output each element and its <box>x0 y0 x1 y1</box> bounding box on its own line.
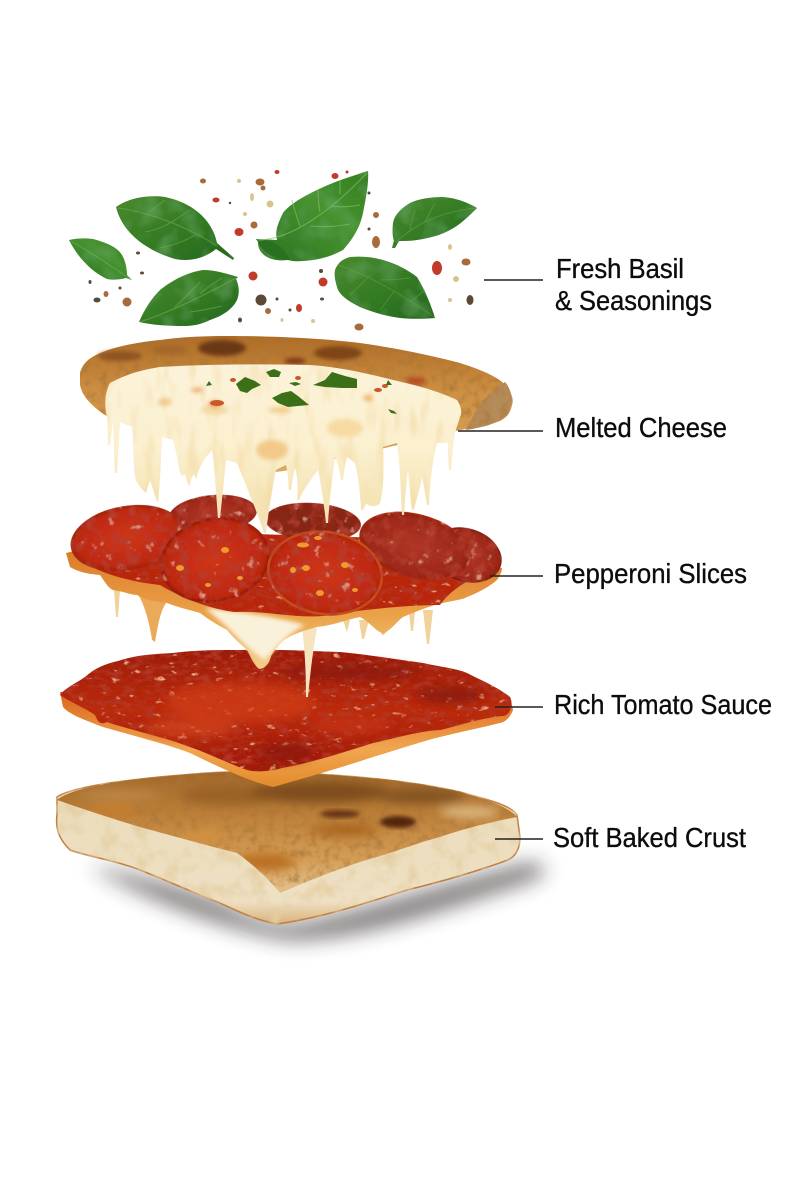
layer: rich tomato sauce <box>60 650 513 787</box>
icon: basil leaf, far left <box>69 238 132 280</box>
red sauce band <box>72 530 498 616</box>
callout: fresh basil and seasonings: Fresh Basil <box>556 253 684 284</box>
pepperoni: far right <box>424 519 508 591</box>
callout: soft baked crust: Soft Baked Crust <box>553 822 746 853</box>
cheese with drips <box>105 364 461 533</box>
pepperoni drips <box>114 590 433 697</box>
shadow under crust <box>90 862 545 940</box>
icon: basil leaf, bottom left <box>139 270 239 326</box>
baked top face <box>57 772 516 893</box>
cheese and sauce base <box>66 540 502 669</box>
callout: fresh basil and seasonings: & Seasonings <box>555 285 712 316</box>
icon: basil leaf, centre <box>256 171 368 261</box>
sauce top <box>60 650 512 771</box>
callout: pepperoni slices: Pepperoni Slices <box>554 558 747 589</box>
icon: basil leaf, bottom right <box>335 257 435 319</box>
crust behind cheese <box>80 336 513 472</box>
pepperoni: back left <box>168 491 258 537</box>
layer: fresh basil and seasonings <box>69 170 477 330</box>
pepperoni: right <box>353 502 477 590</box>
callout: melted cheese: Melted Cheese <box>555 412 727 443</box>
pepperoni: back centre <box>264 500 362 544</box>
sauce light patches <box>145 664 484 761</box>
icon: basil leaf, top right <box>392 197 477 248</box>
crust cut end <box>466 382 512 430</box>
dough base <box>60 692 513 787</box>
pepperoni fat spots <box>176 536 358 596</box>
pepperoni: front left <box>154 509 276 611</box>
golden cheese patches <box>158 388 373 460</box>
callout: fresh basil and seasonings <box>484 253 712 316</box>
callout: rich tomato sauce: Rich Tomato Sauce <box>554 689 772 720</box>
crust body and crumb <box>57 772 520 924</box>
red pepper flecks on cheese <box>210 376 388 406</box>
seasoning specks <box>88 170 474 330</box>
layer: soft baked crust <box>50 765 525 924</box>
pepperoni: front centre <box>263 524 387 622</box>
crust browned spots <box>98 340 426 385</box>
icon: basil leaf, top left <box>116 196 234 260</box>
melted white centre <box>205 608 305 660</box>
herbs on cheese <box>206 369 397 414</box>
pepperoni: left <box>66 498 188 578</box>
pizza layers infographic <box>56 170 772 955</box>
layer: pepperoni slices <box>66 491 508 697</box>
layer: melted cheese <box>80 336 513 533</box>
